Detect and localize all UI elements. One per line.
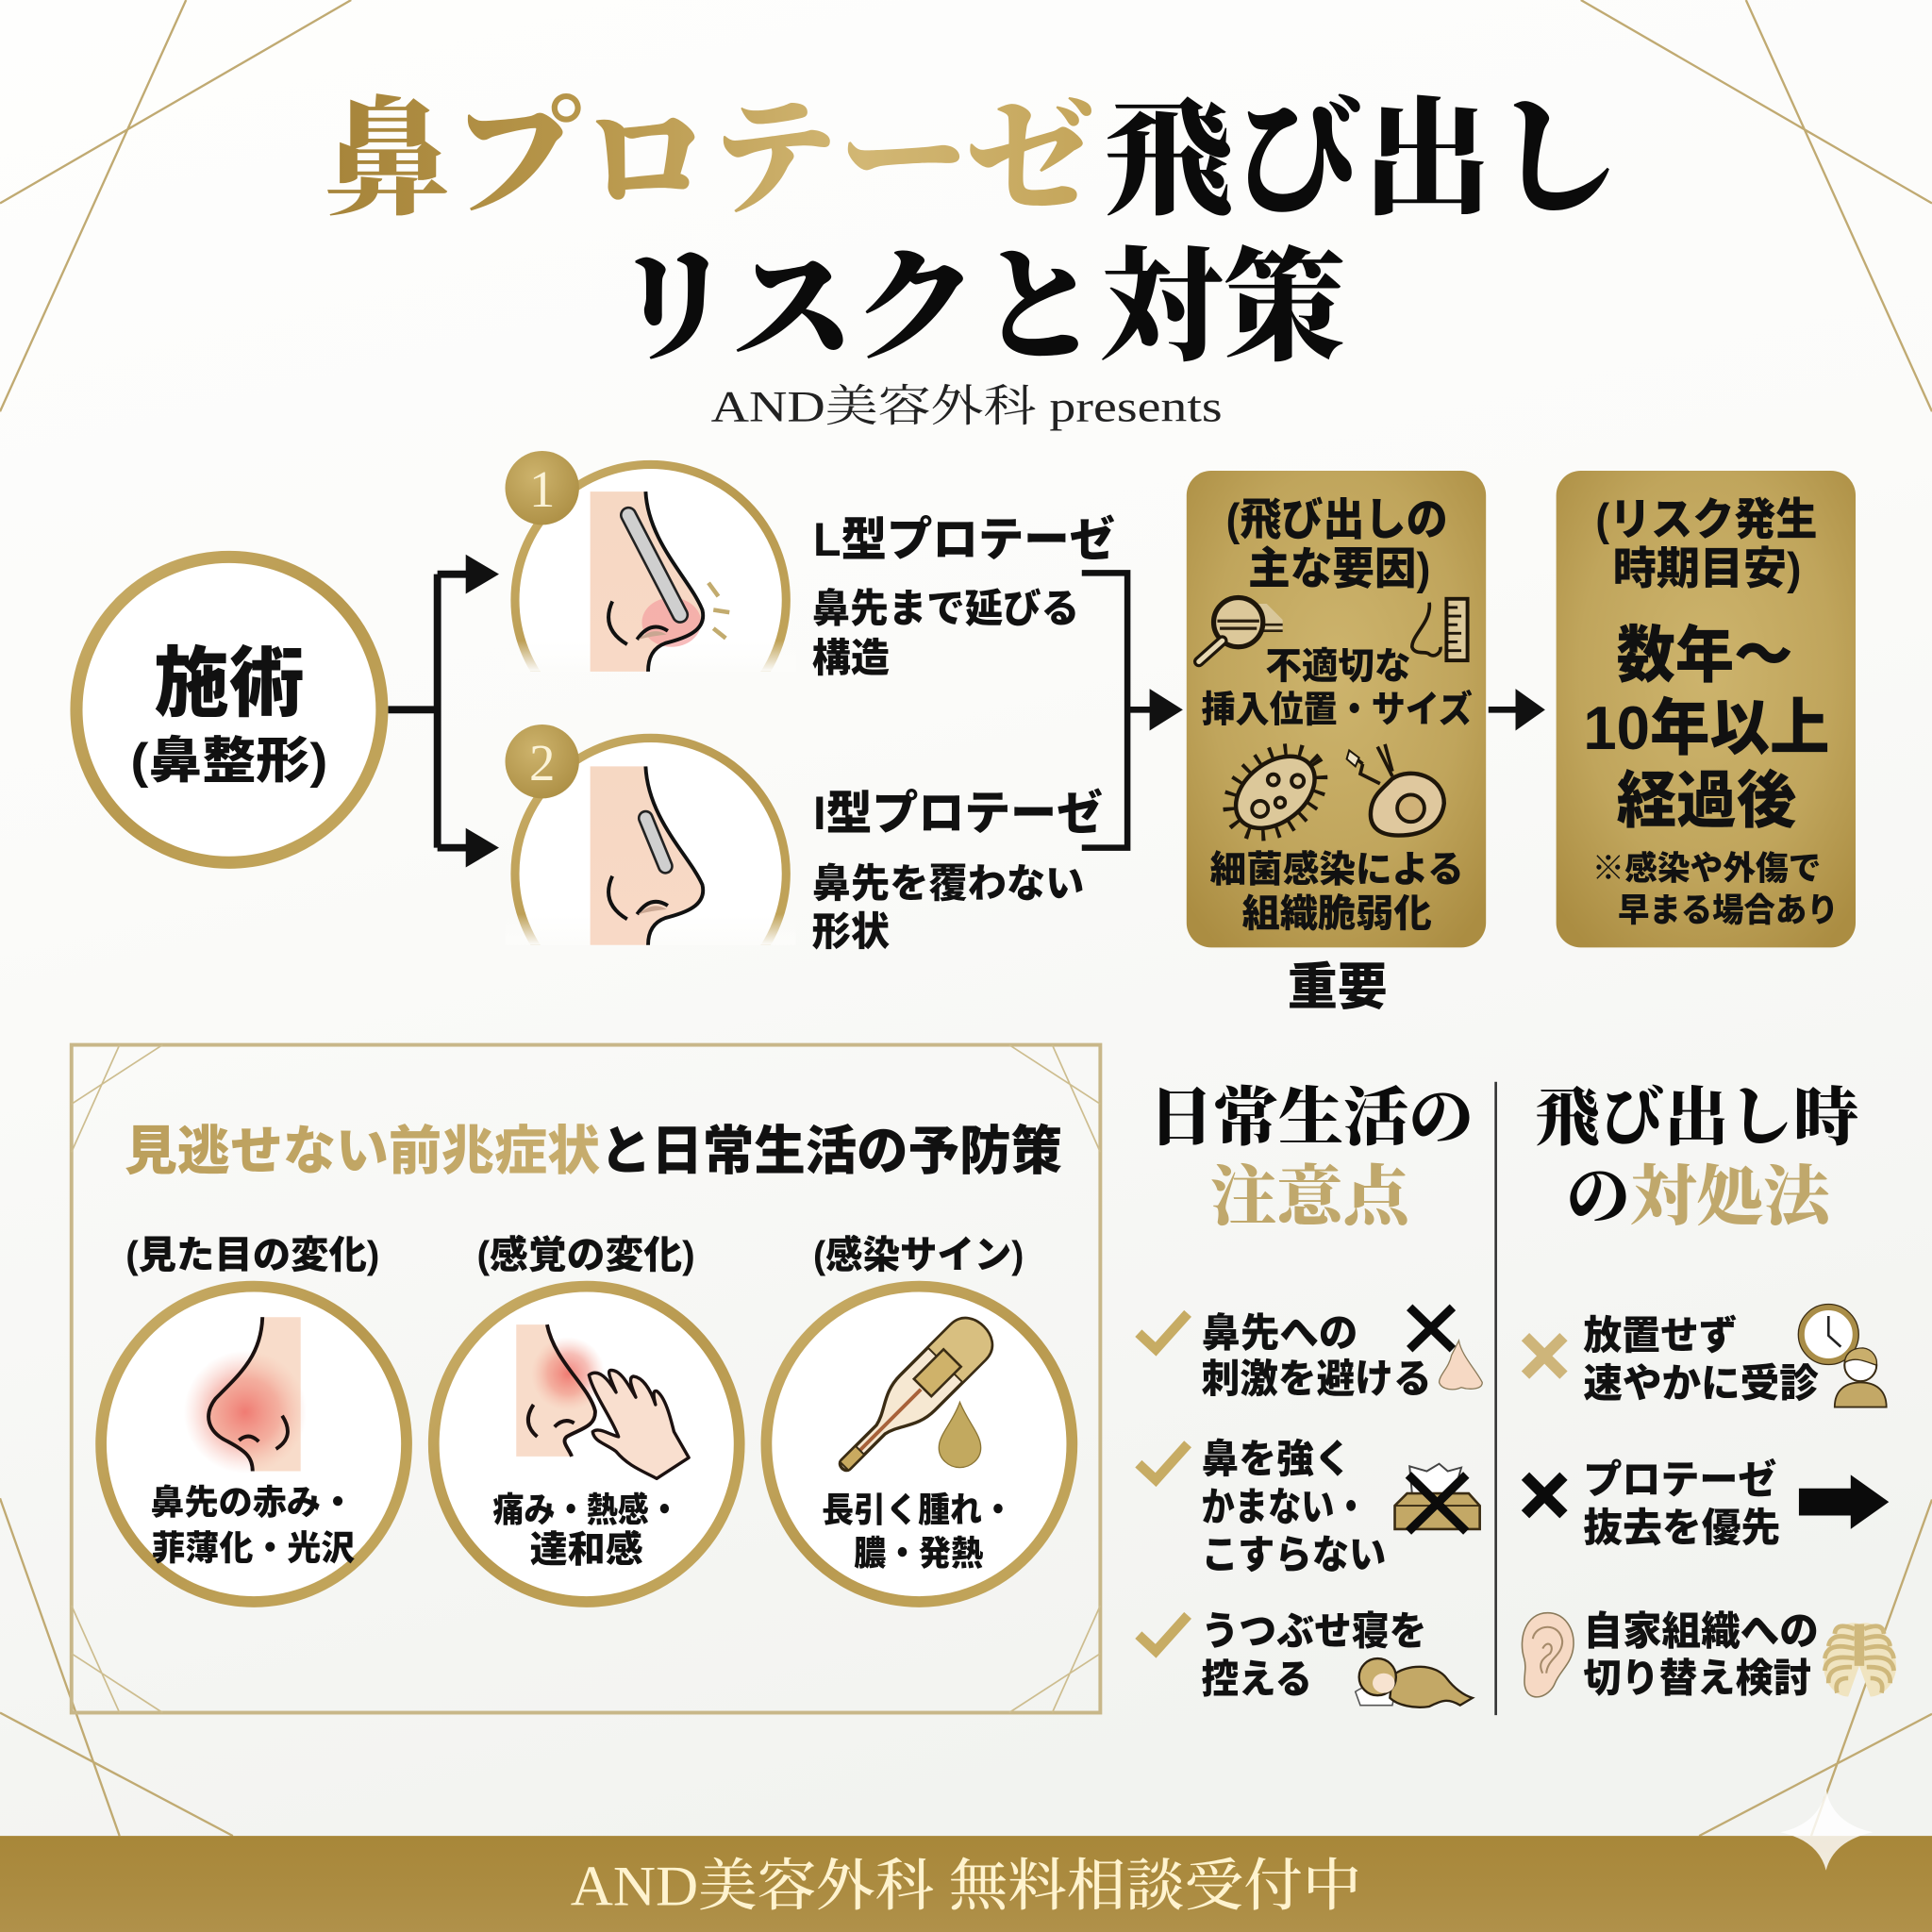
text: 菲薄化・光沢 xyxy=(152,1529,356,1568)
text: 控える xyxy=(1201,1657,1312,1702)
heading: how to respond: の xyxy=(1566,1160,1630,1233)
text xyxy=(1201,1311,1432,1401)
text: うつぶせ寝を xyxy=(1201,1609,1426,1654)
circle: appearance change xyxy=(101,1287,407,1602)
text xyxy=(822,1491,1014,1573)
text xyxy=(1583,1609,1819,1700)
icon: thermometer xyxy=(824,1309,1001,1486)
text: bacterial infection: 細菌感染による xyxy=(1210,850,1464,891)
text: years: 10年以上 xyxy=(1583,693,1830,762)
heading: causes: 主な要因) xyxy=(1248,543,1430,593)
procedure circle xyxy=(76,557,382,862)
heading: daily life cautions: 日常生活の xyxy=(1148,1082,1474,1154)
panel heading xyxy=(125,1122,1062,1181)
text xyxy=(1201,1437,1386,1577)
icon: I-type nose circle xyxy=(510,734,791,945)
title: リスクと対策 xyxy=(611,242,1345,377)
item: avoid sleeping face down xyxy=(1139,1609,1473,1707)
text: L-type implant xyxy=(812,513,1115,680)
text: 抜去を優先 xyxy=(1583,1506,1780,1550)
text: 達和感 xyxy=(530,1530,643,1571)
text xyxy=(1201,1609,1426,1702)
icon: ribcage xyxy=(1824,1623,1896,1697)
text: かまない・ xyxy=(1201,1485,1368,1529)
text: こすらない xyxy=(1201,1533,1386,1577)
text: bacterial infection xyxy=(1210,850,1464,935)
panel: risk timing xyxy=(1557,471,1856,947)
text: bacterial infection: 組織脆弱化 xyxy=(1242,891,1432,935)
panel heading: 見逃せない前兆症状 xyxy=(125,1122,600,1181)
icon: hand xyxy=(589,1370,689,1478)
text xyxy=(150,1483,356,1568)
heading: timing xyxy=(1595,494,1818,593)
text: 膿・発熱 xyxy=(854,1534,984,1573)
badge 1: 1 xyxy=(529,460,555,518)
text: 痛み・熱感・ xyxy=(492,1491,680,1529)
icon: pus drop xyxy=(939,1402,981,1468)
icon: ear xyxy=(1522,1613,1574,1697)
panel: main causes xyxy=(1187,471,1486,947)
text: 放置せず xyxy=(1583,1313,1738,1357)
title xyxy=(323,91,1622,377)
title: 鼻プロテーゼ xyxy=(323,91,1094,232)
heading: causes: (飛び出しの xyxy=(1226,494,1448,544)
text: years: 経過後 xyxy=(1617,766,1796,835)
badge 2 xyxy=(506,724,579,798)
badge 1 xyxy=(506,451,579,525)
text: 鼻先の赤み・ xyxy=(150,1483,355,1522)
text: I-type implant: 鼻先を覆わない xyxy=(812,861,1084,906)
text: 長引く腫れ・ xyxy=(822,1491,1014,1529)
flow connector: procedure to implant types xyxy=(388,555,499,868)
note: 早まる場合あり xyxy=(1618,892,1839,929)
icon: nose and ruler xyxy=(1412,599,1468,660)
text: I-type implant: I型プロテーゼ xyxy=(813,787,1103,840)
subheading: sensation: (感覚の変化) xyxy=(476,1233,695,1276)
icon: nose with cross xyxy=(1409,1307,1482,1390)
arrow: types to causes xyxy=(1082,573,1183,848)
text: プロテーゼ xyxy=(1583,1457,1777,1502)
badge 2: 2 xyxy=(529,734,555,791)
label: important: 重要 xyxy=(1288,959,1388,1015)
heading: daily life cautions xyxy=(1148,1082,1474,1233)
icon: black cross xyxy=(1525,1476,1563,1514)
subtitle: AND美容外科 presents xyxy=(711,383,1223,432)
title: 飛び出し xyxy=(1104,91,1622,232)
text: I-type implant: 形状 xyxy=(812,909,890,954)
circle: infection signs xyxy=(766,1287,1072,1602)
icon: L-type nose circle xyxy=(510,460,791,672)
icon: damaged tissue with tools xyxy=(1347,744,1444,836)
text: 鼻先への xyxy=(1201,1311,1357,1356)
text: 刺激を避ける xyxy=(1201,1357,1432,1401)
item: autologous tissue xyxy=(1522,1609,1896,1700)
icon: clock xyxy=(1798,1305,1858,1365)
heading: timing: 時期目安) xyxy=(1613,543,1802,593)
heading: how to respond: 飛び出し時 xyxy=(1535,1082,1858,1154)
icon: check xyxy=(1139,1615,1188,1651)
text: improper position xyxy=(1201,647,1473,730)
text: I-type implant xyxy=(812,787,1103,954)
icon: sleeping baby xyxy=(1356,1658,1473,1707)
vertical divider xyxy=(1494,1082,1497,1715)
icon: sparkle xyxy=(1780,1789,1873,1871)
text xyxy=(1583,1313,1819,1406)
note: ※感染や外傷で xyxy=(1592,851,1821,888)
procedure circle: (鼻整形) xyxy=(130,734,327,789)
text: improper position: 挿入位置・サイズ xyxy=(1201,689,1473,730)
text: years xyxy=(1583,621,1830,835)
circle: sensation change xyxy=(434,1287,740,1602)
panel: warning signs xyxy=(72,1045,1100,1713)
arrow: causes to timing xyxy=(1489,689,1545,731)
text: improper position: 不適切な xyxy=(1265,647,1411,688)
text xyxy=(492,1491,680,1571)
heading: how to respond xyxy=(1535,1082,1858,1233)
panel heading: と日常生活の予防策 xyxy=(600,1122,1062,1181)
footer text: AND美容外科 無料相談受付中 xyxy=(571,1854,1361,1917)
text: L-type implant: 鼻先まで延びる xyxy=(812,587,1079,631)
subheading: infection: (感染サイン) xyxy=(813,1233,1024,1276)
text: L-type implant: 構造 xyxy=(812,636,890,680)
heading: timing: (リスク発生 xyxy=(1595,494,1818,544)
item: implant removal priority xyxy=(1525,1457,1889,1550)
text: 自家組織への xyxy=(1583,1609,1819,1654)
icon: person xyxy=(1835,1348,1887,1407)
procedure circle: 施術 xyxy=(154,641,305,726)
text: 切り替え検討 xyxy=(1583,1656,1811,1700)
heading: daily life cautions: 注意点 xyxy=(1210,1160,1415,1233)
icon: black arrow xyxy=(1799,1474,1889,1529)
text: 速やかに受診 xyxy=(1583,1361,1819,1406)
note xyxy=(1592,851,1839,929)
item: avoid stimulation xyxy=(1139,1307,1482,1401)
icon: magnifier over tissue xyxy=(1199,597,1283,661)
icon: check xyxy=(1139,1313,1188,1349)
text: years: 数年〜 xyxy=(1617,621,1792,690)
heading: causes xyxy=(1226,494,1448,593)
text xyxy=(1583,1457,1780,1550)
heading: how to respond: 対処法 xyxy=(1630,1160,1838,1233)
footer bar xyxy=(0,1836,1932,1932)
item: do not blow hard xyxy=(1139,1437,1480,1577)
text: L-type implant: L型プロテーゼ xyxy=(813,513,1115,566)
icon: check xyxy=(1139,1444,1188,1480)
icon: bacteria xyxy=(1219,739,1332,846)
text: 鼻を強く xyxy=(1201,1437,1352,1481)
item: see a doctor soon xyxy=(1525,1305,1887,1407)
icon: gold cross xyxy=(1525,1337,1563,1375)
icon: tissue box with cross xyxy=(1395,1464,1480,1532)
subheading: appearance: (見た目の変化) xyxy=(125,1233,379,1276)
